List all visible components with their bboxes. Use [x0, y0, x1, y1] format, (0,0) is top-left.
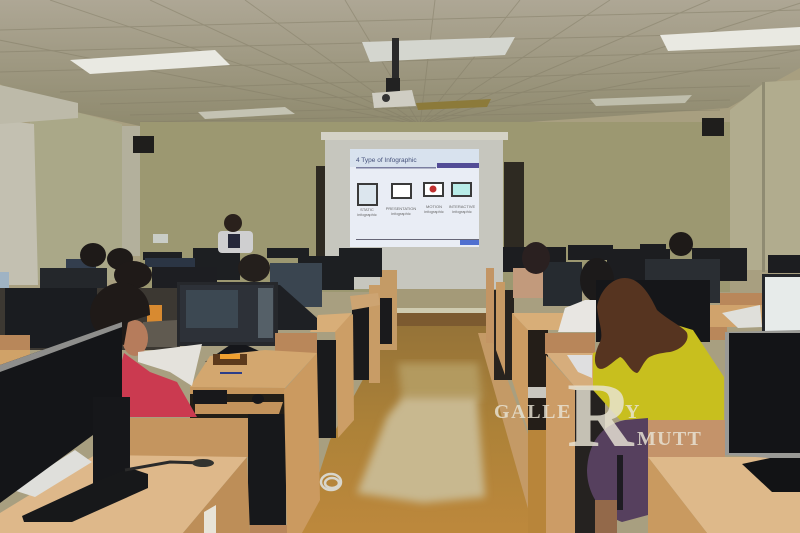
back right desk	[710, 274, 800, 340]
front left desk	[0, 418, 250, 533]
wall sign	[153, 234, 168, 243]
ceiling	[0, 0, 800, 126]
projected slide	[350, 149, 479, 247]
floor rail right	[478, 333, 565, 533]
back desks left	[310, 270, 397, 438]
left middle desk	[190, 350, 320, 533]
cable on floor	[321, 474, 341, 490]
watermark: GALLE	[494, 401, 572, 423]
watermark	[494, 364, 702, 466]
left wall and right wall	[0, 80, 800, 285]
slide captions: STATIC	[360, 207, 374, 212]
seated students right	[513, 232, 693, 332]
student in pink shirt	[90, 282, 197, 417]
presenter	[218, 214, 253, 253]
watermark: Y	[625, 401, 640, 423]
slide captions: infographic	[357, 212, 377, 217]
slide captions: MOTION	[426, 204, 442, 209]
student in yellow shirt	[593, 278, 724, 420]
slide captions: infographic	[391, 211, 411, 216]
slide title: 4 Type of Infographic	[356, 157, 417, 164]
purple chair	[587, 418, 648, 533]
front right monitor	[725, 330, 800, 492]
ceiling lights	[70, 27, 800, 119]
watermark: R	[567, 364, 635, 466]
middle desk back panel	[275, 333, 317, 354]
slide captions	[357, 204, 476, 217]
middle monitor	[177, 282, 278, 362]
slide captions: INTERACTIVE	[449, 204, 476, 209]
back wall	[140, 122, 730, 292]
slide captions: PRESENTATION	[386, 206, 416, 211]
front right desk	[648, 420, 800, 533]
loudspeakers	[133, 118, 724, 153]
projector screen	[321, 132, 508, 289]
wooden floor	[300, 326, 537, 533]
front wall under screen	[385, 289, 495, 327]
projector on ceiling mount	[372, 38, 416, 108]
slide captions: infographic	[424, 209, 444, 214]
seated students back left	[0, 243, 317, 350]
slide captions: infographic	[452, 209, 472, 214]
left back monitor	[5, 288, 97, 348]
monitor behind woman	[596, 280, 710, 342]
slide icons	[358, 183, 471, 205]
left back desk	[0, 335, 30, 365]
orange box and pen on desk	[213, 354, 247, 374]
right monitors back	[503, 244, 800, 306]
watermark: MUTT	[637, 428, 702, 450]
monitors back left	[0, 248, 382, 310]
paper on desk	[138, 344, 202, 386]
front left monitor	[0, 322, 214, 522]
right side desks back	[486, 268, 595, 533]
air conditioner	[0, 85, 78, 124]
right middle desk	[546, 353, 605, 533]
dark side curtains	[316, 162, 524, 256]
